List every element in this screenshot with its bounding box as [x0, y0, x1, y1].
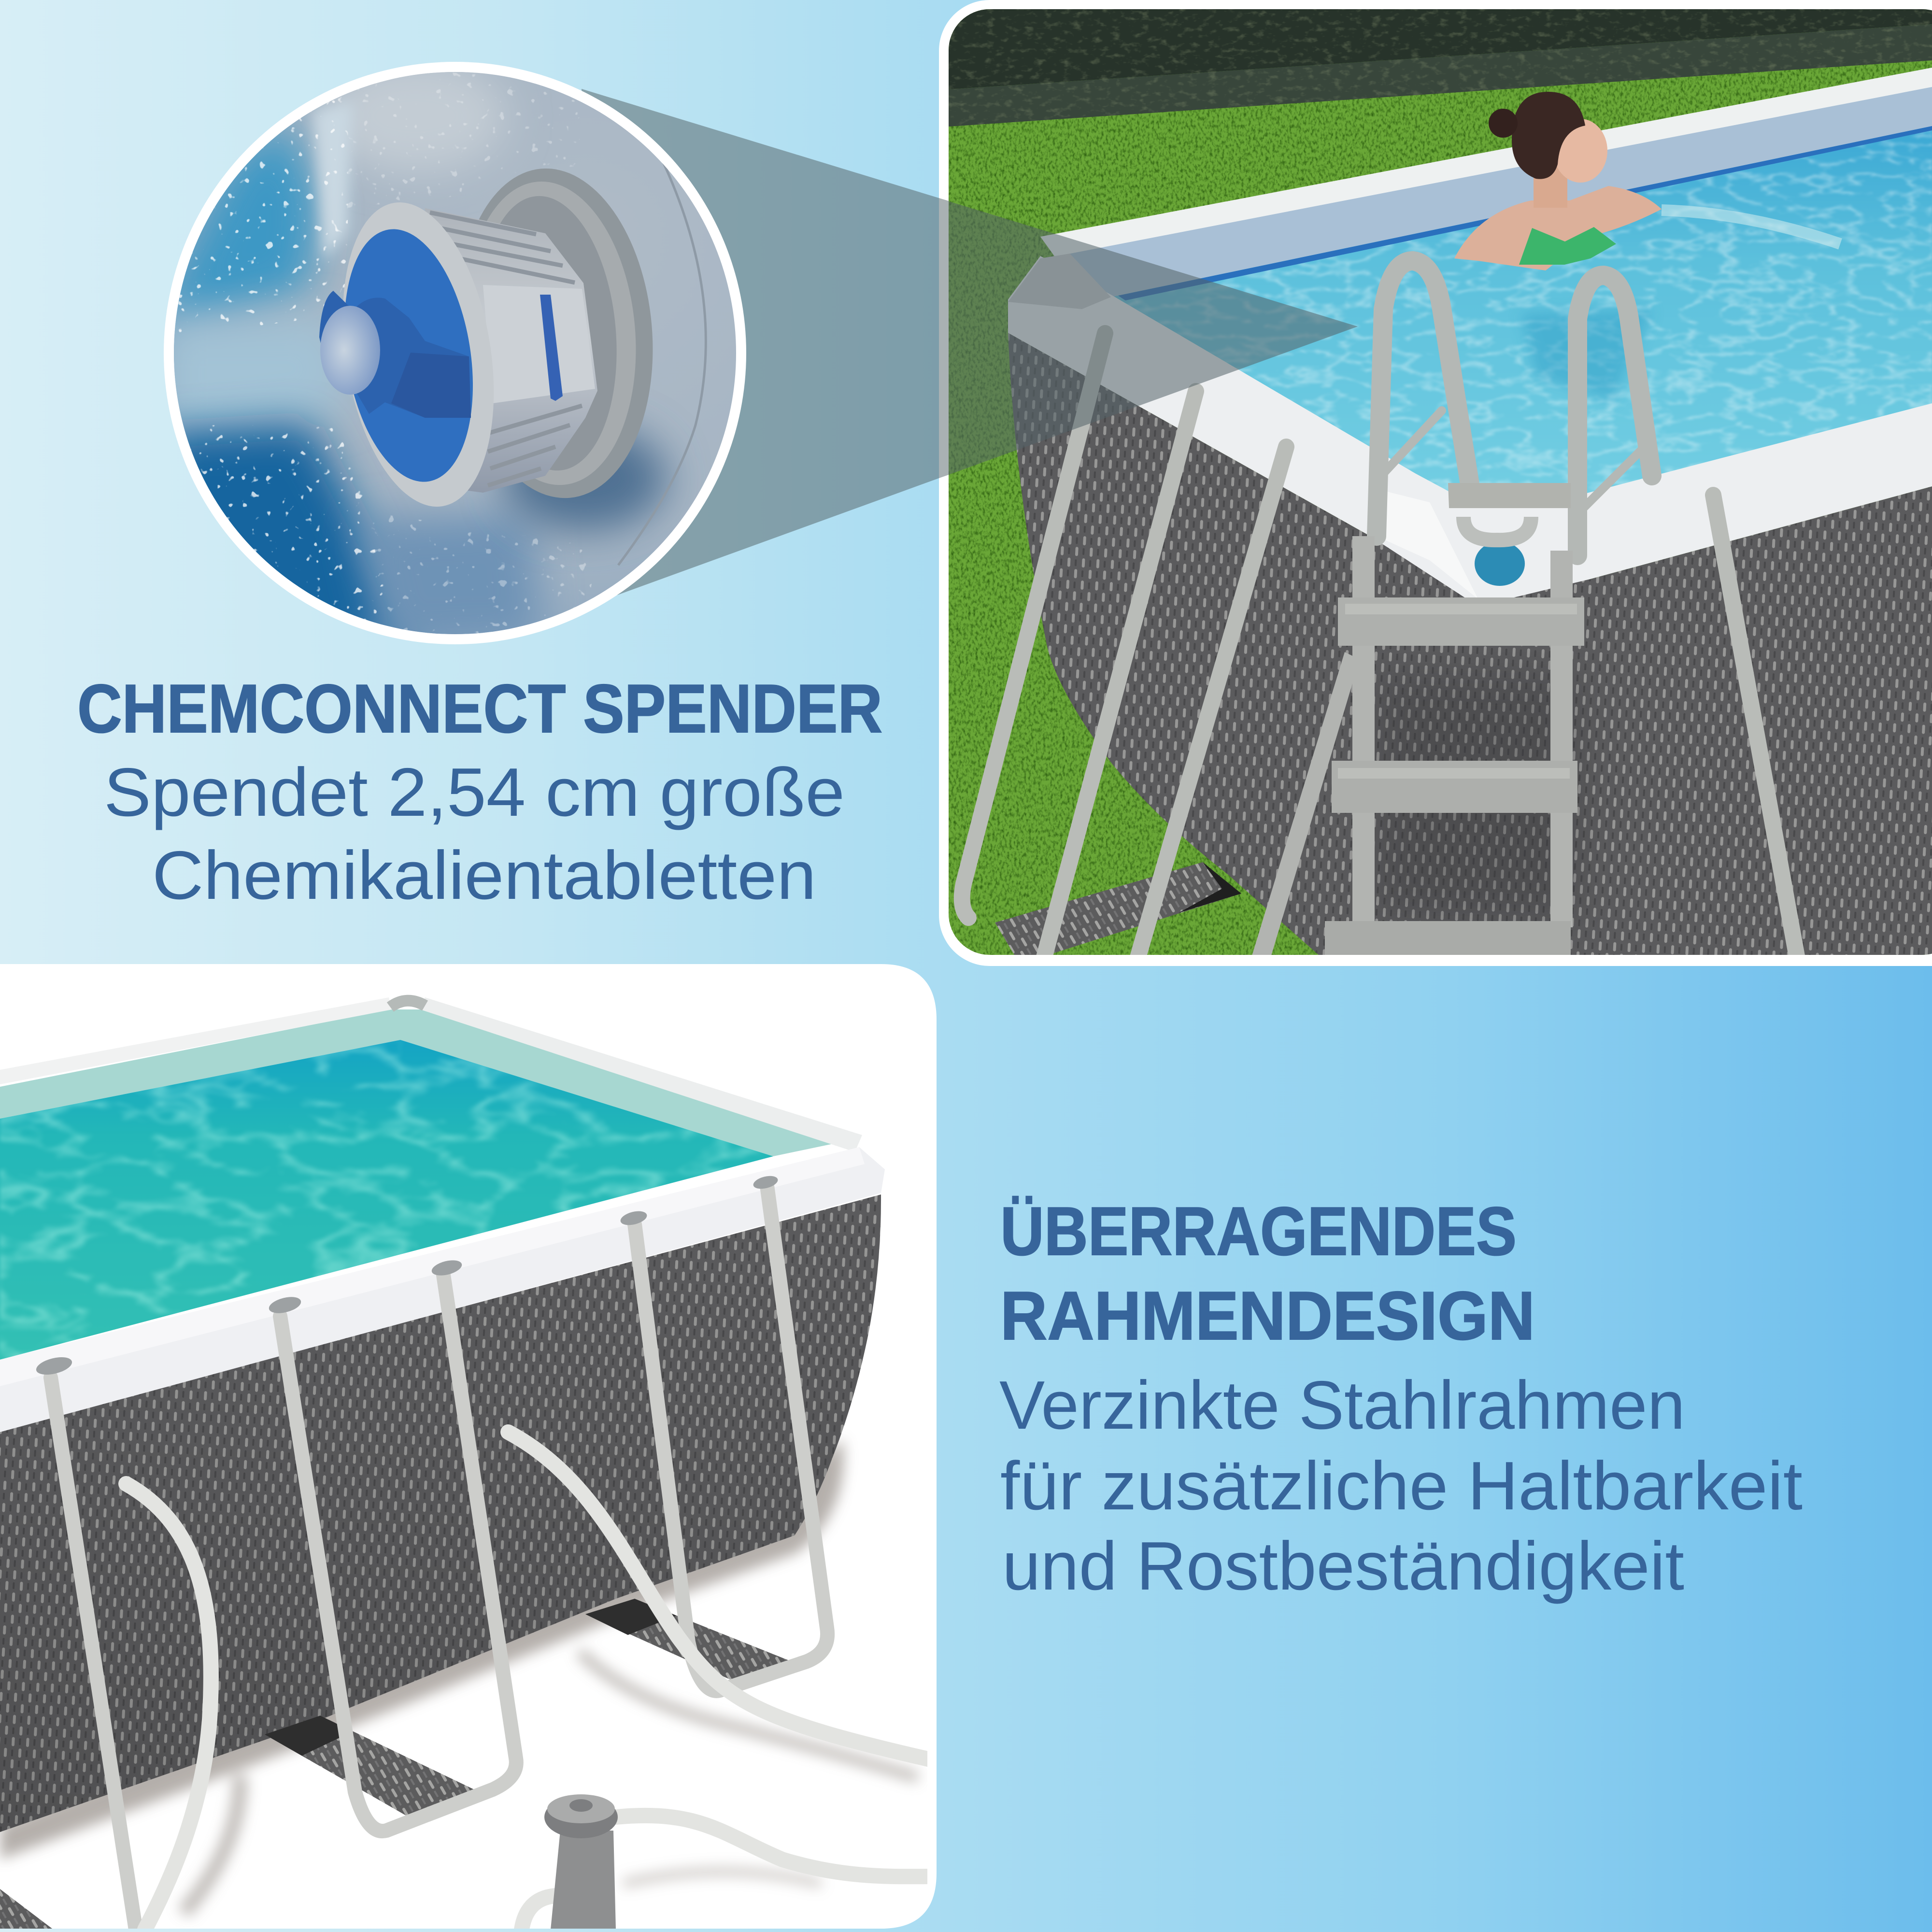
mat under frame: [995, 862, 1241, 955]
text: Spendet line: Spendet 2,54 cm große: [104, 754, 845, 831]
front white rail: [0, 1147, 885, 1432]
panel: white pool product image: [0, 964, 937, 1930]
support tubes: [51, 1186, 827, 1930]
heading: Rahmendesign: RAHMENDESIGN: [1000, 1278, 1535, 1354]
white top rail: [1008, 256, 1932, 606]
nozzle: [320, 306, 380, 395]
floor mats: [0, 1599, 792, 1929]
text: und Rostbeständigkeit: und Rostbeständigkeit: [1002, 1528, 1684, 1605]
inner wall: [0, 1009, 833, 1156]
callout wedge linking lens to photo: [582, 89, 939, 595]
ladder handrails: [1377, 261, 1652, 555]
hoses: [126, 1432, 935, 1930]
text: für zusätzliche Haltbarkeit: für zusätzliche Haltbarkeit: [1000, 1448, 1803, 1524]
blue disc: [327, 220, 490, 491]
rail mounts: [34, 1174, 779, 1378]
heading: Überragendes: ÜBERRAGENDES: [1000, 1193, 1517, 1270]
ground shadows: [0, 1439, 918, 1913]
left support tubes: [962, 333, 1797, 959]
photo white frame: [939, 0, 1932, 966]
heading: ChemConnect Spender: CHEMCONNECT SPENDER: [77, 670, 882, 747]
ladder posts and steps: [1251, 536, 1584, 960]
flange back ring: [445, 160, 666, 506]
dispenser close-up: [159, 58, 749, 647]
text: Chemikalientabletten line: Chemikalientabletten: [152, 837, 816, 914]
pool illustration: [0, 997, 935, 1930]
filter pump: [544, 1794, 618, 1930]
panel: zoom lens on dispenser: [159, 58, 749, 647]
ladder inner step and handle: [1448, 483, 1571, 540]
photo scene: [918, 9, 1932, 960]
water: [0, 1040, 773, 1360]
blue slit: [540, 295, 563, 401]
wedge shadow over photo: [918, 192, 1358, 486]
panel: pool photo with swimmer and ladder: [918, 0, 1932, 966]
ribbed housing: [411, 208, 597, 493]
lens white ring: [164, 62, 746, 644]
wedge over photo frame: [939, 198, 949, 478]
text: Verzinkte Stahlrahmen: Verzinkte Stahlrahmen: [999, 1367, 1685, 1444]
flange stitching: [618, 97, 706, 565]
swimmer: [1454, 92, 1840, 270]
front ring: [323, 191, 514, 518]
skimmer opening: [1475, 541, 1525, 586]
water bubbles: [164, 87, 348, 338]
knob: [319, 291, 471, 418]
white background card: [0, 964, 937, 1929]
wicker wall: [0, 1194, 881, 1832]
back rails: [0, 997, 862, 1152]
wicker wall: [1008, 333, 1932, 955]
